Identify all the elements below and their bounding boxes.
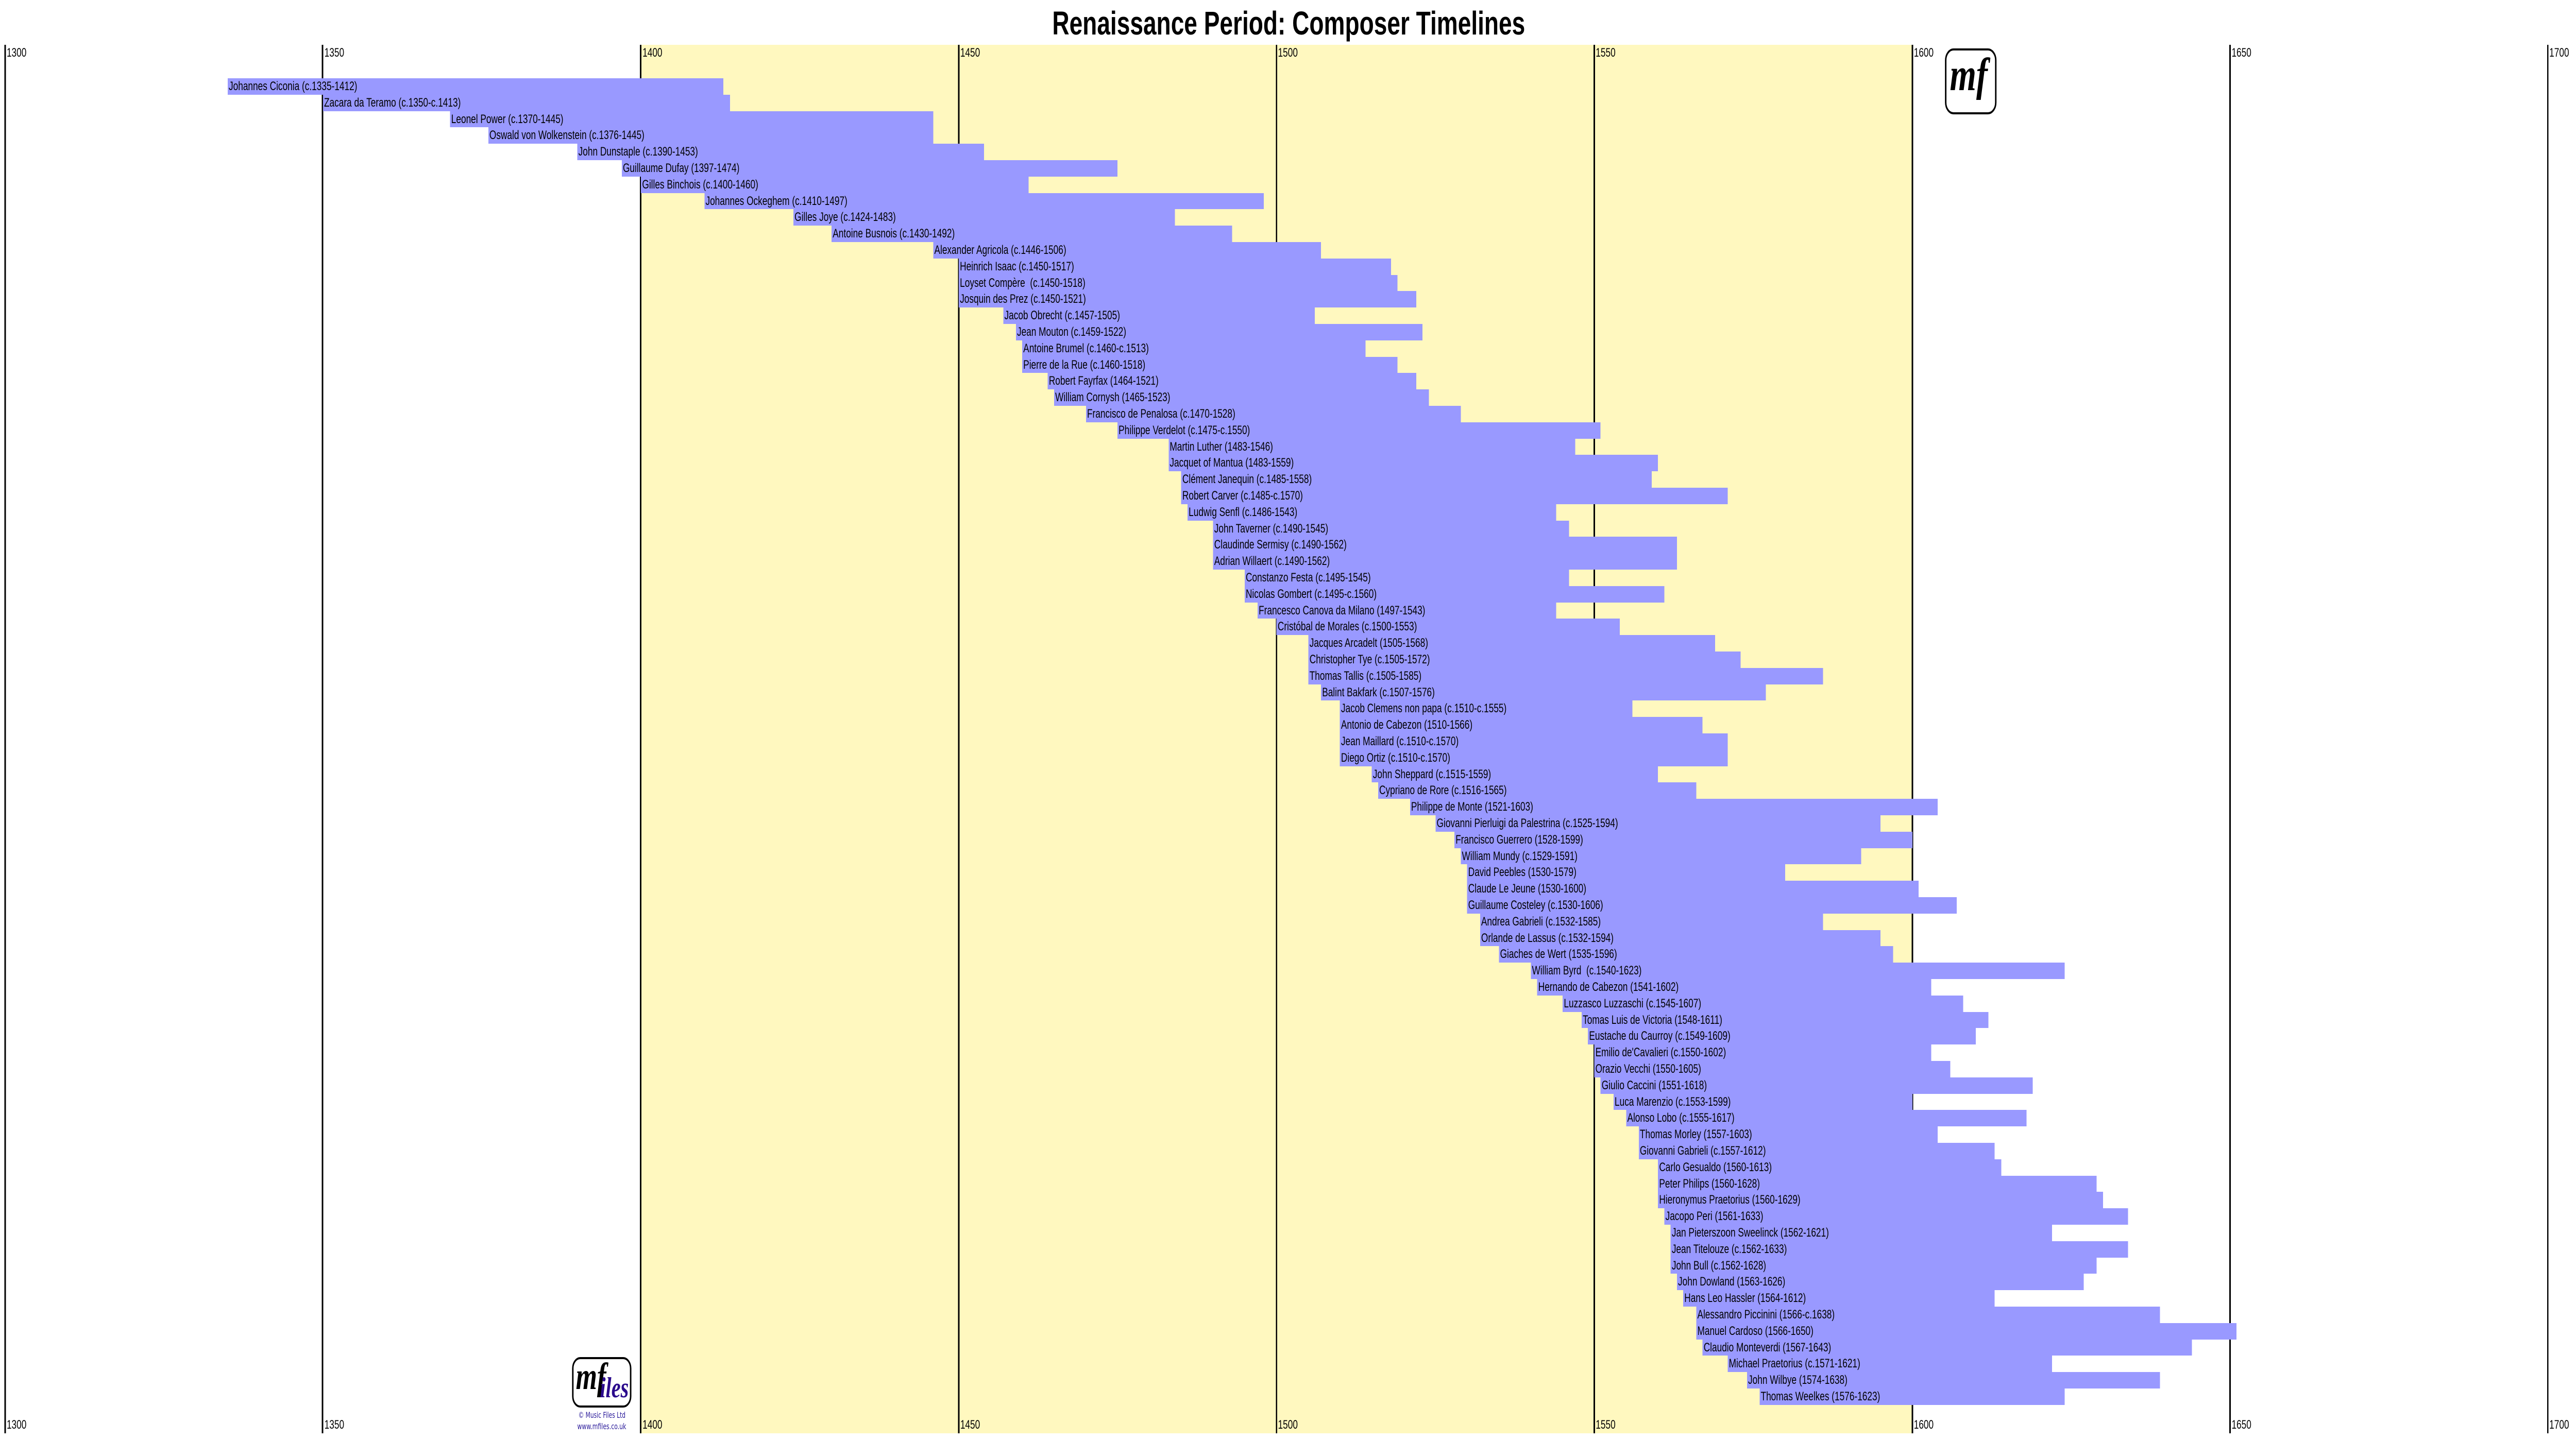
bar: Andrea Gabrieli: Andrea Gabrieli (c.1532-1585) (1481, 915, 1601, 929)
bar: Michael Praetorius: Michael Praetorius (c.1571-1621) (1729, 1357, 1860, 1370)
bar: Nicolas Gombert (1245, 586, 1664, 603)
bar: Martin Luther: Martin Luther (1483-1546) (1170, 440, 1273, 454)
bar: Giaches de Wert (1499, 946, 1893, 963)
year axis: top labels (7, 46, 2569, 60)
bar: Antoine Busnois: Antoine Busnois (c.1430-1492) (833, 227, 955, 241)
logo text: iles: iles (600, 1372, 629, 1404)
logo: mf top right: mf (1950, 49, 1991, 100)
bar: Giaches de Wert: Giaches de Wert (1535-1596) (1500, 947, 1617, 961)
bar: Hernando de Cabezon: Hernando de Cabezon (1541-1602) (1538, 980, 1679, 994)
bar: Leonel Power (450, 111, 933, 127)
bar: Tomas Luis de Victoria: Tomas Luis de Victoria (1548-1611) (1583, 1013, 1722, 1027)
bar: Adrian Willaert: Adrian Willaert (c.1490-1562) (1214, 554, 1330, 568)
bar: Loyset Compere (959, 275, 1397, 291)
bar: Adrian Willaert (1213, 553, 1677, 570)
bar: David Peebles (1467, 864, 1785, 881)
bar: Tomas Luis de Victoria (1582, 1012, 1988, 1028)
website line: www.mfiles.co.uk (577, 1422, 626, 1432)
bar: Luzzasco Luzzaschi: Luzzasco Luzzaschi (c.1545-1607) (1564, 997, 1701, 1010)
bar: Martin Luther (1168, 439, 1575, 455)
bar: John Dunstaple: John Dunstaple (c.1390-1453) (579, 145, 698, 159)
bar: Christopher Tye (1309, 652, 1741, 668)
bar: Jacquet of Mantua (1168, 455, 1658, 471)
bar: Manuel Cardoso (1696, 1323, 2236, 1340)
bar: Robert Fayrfax: Robert Fayrfax (1464-1521) (1049, 374, 1159, 388)
bar: Gilles Joye (793, 209, 1175, 226)
bar: Peter Philips (1658, 1176, 2097, 1192)
bar: Thomas Tallis: Thomas Tallis (c.1505-1585) (1310, 669, 1421, 683)
bar: Giovanni Pierluigi da Palestrina: Giovanni Pierluigi da Palestrina (c.1525-1594) (1437, 816, 1618, 830)
bar: Zacara da Teramo: Zacara da Teramo (c.1350-c.1413) (324, 96, 461, 110)
bar: Orazio Vecchi (1594, 1061, 1950, 1077)
bar: Jan Pieterszoon Sweelinck (1671, 1225, 2052, 1241)
bar: Claudinde Sermisy (1213, 537, 1677, 553)
year label: 1350 top: 1350 (325, 46, 344, 60)
bar: John Sheppard (1372, 766, 1658, 782)
bar: Balint Bakfark (1321, 684, 1766, 700)
bar: Pierre de la Rue: Pierre de la Rue (c.1460-1518) (1023, 358, 1145, 372)
bar: Gilles Joye: Gilles Joye (c.1424-1483) (794, 210, 896, 224)
year label: 1300 bottom: 1300 (7, 1418, 26, 1432)
bar: Thomas Weelkes: Thomas Weelkes (1576-1623) (1761, 1390, 1880, 1403)
bar: Jean Titelouze (1671, 1241, 2128, 1258)
bar: John Dowland (1677, 1274, 2083, 1290)
bar: Oswald von Wolkenstein: Oswald von Wolkenstein (c.1376-1445) (489, 128, 645, 142)
bar: Philippe Verdelot: Philippe Verdelot (c.1475-c.1550) (1118, 423, 1250, 437)
bar: Claude Le Jeune: Claude Le Jeune (1530-1600) (1468, 882, 1586, 896)
year label: 1450 bottom: 1450 (960, 1418, 980, 1432)
bar: Gilles Binchois (641, 177, 1028, 193)
bar: Alexander Agricola (933, 242, 1321, 259)
bar: Christopher Tye: Christopher Tye (c.1505-1572) (1310, 653, 1430, 666)
bar: Francisco Guerrero (1454, 832, 1912, 848)
bar: Johannes Ockeghem: Johannes Ockeghem (c.1410-1497) (705, 194, 848, 208)
bar: William Byrd: William Byrd (c.1540-1623) (1532, 964, 1641, 978)
bar: Jacques Arcadelt: Jacques Arcadelt (1505-1568) (1310, 636, 1428, 650)
bar: Jan Pieterszoon Sweelinck: Jan Pieterszoon Sweelinck (1562-1621) (1672, 1226, 1829, 1240)
bar: Francisco de Penalosa: Francisco de Penalosa (c.1470-1528) (1087, 407, 1235, 421)
bar: Jacques Arcadelt (1309, 635, 1715, 652)
bar: Oswald von Wolkenstein (488, 127, 933, 144)
year label: 1500 bottom: 1500 (1278, 1418, 1298, 1432)
year label: 1350 bottom: 1350 (325, 1418, 344, 1432)
bar: Andrea Gabrieli (1480, 914, 1823, 930)
bar: Loyset Compere: Loyset Compère (c.1450-1518) (960, 276, 1086, 290)
bar: Pierre de la Rue (1022, 357, 1397, 373)
bar: David Peebles: David Peebles (1530-1579) (1468, 865, 1577, 879)
bar: Jacopo Peri: Jacopo Peri (1561-1633) (1666, 1209, 1764, 1223)
bar: Alonso Lobo (1626, 1110, 2027, 1126)
bar: John Taverner (1213, 521, 1569, 537)
title: Renaissance Period: Composer Timelines (1052, 5, 1525, 42)
bar: Jacopo Peri (1664, 1208, 2128, 1225)
bar: Johannes Ciconia (228, 78, 723, 95)
copyright line: © Music Files Ltd (579, 1411, 625, 1420)
bar: Robert Carver: Robert Carver (c.1485-c.1570) (1182, 489, 1303, 503)
bar: Ludwig Senfl: Ludwig Senfl (c.1486-1543) (1189, 505, 1297, 519)
bar: Giulio Caccini: Giulio Caccini (1551-1618) (1602, 1078, 1707, 1092)
year label: 1400 bottom: 1400 (642, 1418, 663, 1432)
year label: 1500 top: 1500 (1278, 46, 1298, 60)
bar: Alexander Agricola: Alexander Agricola (c.1446-1506) (934, 243, 1066, 257)
bar: Manuel Cardoso: Manuel Cardoso (1566-1650) (1697, 1324, 1814, 1338)
year label: 1700 top: 1700 (2549, 46, 2569, 60)
year label: 1700 bottom: 1700 (2549, 1418, 2569, 1432)
chart: composer timeline bars (228, 78, 2236, 1405)
bar: William Mundy: William Mundy (c.1529-1591) (1462, 849, 1578, 863)
bar: Josquin des Prez: Josquin des Prez (c.1450-1521) (960, 292, 1086, 306)
bar: Alessandro Piccinini: Alessandro Piccinini (1566-c.1638) (1697, 1308, 1835, 1322)
bar: John Dowland: John Dowland (1563-1626) (1678, 1275, 1785, 1289)
bar: Antoine Brumel: Antoine Brumel (c.1460-c.1513) (1023, 341, 1149, 355)
bar: Hieronymus Praetorius: Hieronymus Praetorius (1560-1629) (1659, 1193, 1801, 1207)
bar: Claudinde Sermisy: Claudinde Sermisy (c.1490-1562) (1214, 538, 1347, 552)
bar: Carlo Gesualdo: Carlo Gesualdo (1560-1613) (1659, 1160, 1772, 1174)
year axis: bottom labels (7, 1418, 2569, 1432)
bar: John Bull: John Bull (c.1562-1628) (1672, 1259, 1766, 1273)
bar: Diego Ortiz: Diego Ortiz (c.1510-c.1570) (1341, 751, 1450, 765)
bar: Orlande de Lassus: Orlande de Lassus (c.1532-1594) (1481, 931, 1614, 945)
logo: mfiles bottom left with copyright (573, 1356, 631, 1432)
bar: Jean Titelouze: Jean Titelouze (c.1562-1633) (1672, 1242, 1787, 1256)
bar: Guillaume Costeley (1467, 897, 1957, 914)
logo: mf top right (1946, 49, 1996, 113)
bar: Alessandro Piccinini (1696, 1307, 2160, 1323)
year label: 1550 top: 1550 (1596, 46, 1616, 60)
bar: Clement Janequin: Clément Janequin (c.1485-1558) (1182, 472, 1312, 486)
bar: William Cornysh (1054, 389, 1429, 406)
bar: Guillaume Dufay: Guillaume Dufay (1397-1474) (623, 161, 739, 175)
year label: 1550 bottom: 1550 (1596, 1418, 1616, 1432)
bar: Antoine Busnois (832, 226, 1232, 242)
bar: Philippe Verdelot (1117, 422, 1601, 439)
bar: Diego Ortiz (1340, 750, 1727, 766)
panel: Renaissance period band 1400-1600 (641, 45, 1911, 1433)
bar: Constanzo Festa: Constanzo Festa (c.1495-1545) (1246, 571, 1371, 585)
bar: Hans Leo Hassler (1683, 1290, 1995, 1307)
bar: John Bull (1671, 1258, 2097, 1274)
bar: Thomas Morley: Thomas Morley (1557-1603) (1640, 1127, 1752, 1141)
bar: Giulio Caccini (1601, 1077, 2033, 1094)
bar: Jacquet of Mantua: Jacquet of Mantua (1483-1559) (1170, 456, 1294, 470)
year label: 1300 top: 1300 (7, 46, 26, 60)
bar: Antonio de Cabezon (1340, 717, 1703, 733)
bar: Johannes Ciconia: Johannes Ciconia (c.1335-1412) (229, 79, 357, 93)
bar: Orazio Vecchi: Orazio Vecchi (1550-1605) (1596, 1062, 1701, 1076)
bar: Cypriano de Rore: Cypriano de Rore (c.1516-1565) (1379, 783, 1507, 797)
bar: Constanzo Festa (1245, 570, 1569, 586)
bar: Gilles Binchois: Gilles Binchois (c.1400-1460) (642, 178, 758, 192)
bar: Heinrich Isaac: Heinrich Isaac (c.1450-1517) (960, 260, 1074, 273)
bar: Claudio Monteverdi: Claudio Monteverdi (1567-1643) (1704, 1341, 1831, 1355)
bar: Jean Mouton (1016, 324, 1422, 340)
bar: John Sheppard: John Sheppard (c.1515-1559) (1373, 767, 1491, 781)
bar: Johannes Ockeghem (704, 193, 1264, 209)
bar: Luca Marenzio: Luca Marenzio (c.1553-1599) (1615, 1095, 1731, 1109)
bar: Francesco Canova da Milano (1258, 603, 1556, 619)
bar: Ludwig Senfl (1188, 504, 1556, 521)
bar: Eustache du Caurroy: Eustache du Caurroy (c.1549-1609) (1589, 1029, 1731, 1043)
bar: Guillaume Dufay (622, 160, 1117, 177)
bar: Francesco Canova da Milano: Francesco Canova da Milano (1497-1543) (1259, 604, 1425, 618)
bar: Philippe de Monte: Philippe de Monte (1521-1603) (1411, 800, 1533, 814)
bar: Guillaume Costeley: Guillaume Costeley (c.1530-1606) (1468, 898, 1603, 912)
bar: Emilio de'Cavalieri: Emilio de'Cavalieri (c.1550-1602) (1596, 1045, 1726, 1059)
bar: Francisco Guerrero: Francisco Guerrero (1528-1599) (1455, 833, 1583, 847)
bar: Nicolas Gombert: Nicolas Gombert (c.1495-c.1560) (1246, 587, 1377, 601)
bar: John Taverner: John Taverner (c.1490-1545) (1214, 522, 1328, 536)
bar: Cristobal de Morales (1277, 619, 1620, 635)
bar: Francisco de Penalosa (1086, 406, 1461, 422)
logo text: mf: mf (576, 1356, 608, 1397)
bar: Hieronymus Praetorius (1658, 1192, 2103, 1208)
bar: Giovanni Gabrieli: Giovanni Gabrieli (c.1557-1612) (1640, 1144, 1766, 1158)
bar: William Cornysh: William Cornysh (1465-1523) (1055, 390, 1171, 404)
bar: Robert Carver (1181, 488, 1727, 504)
bar: Philippe de Monte (1410, 799, 1938, 815)
bar: Zacara da Teramo (323, 95, 730, 111)
bar: Claudio Monteverdi (1703, 1340, 2192, 1356)
bar: John Dunstaple (577, 144, 984, 160)
bar: Carlo Gesualdo (1658, 1159, 2002, 1176)
bar: Balint Bakfark: Balint Bakfark (c.1507-1576) (1322, 685, 1435, 699)
bar: Claude Le Jeune (1467, 881, 1919, 897)
bar: John Wilbye: John Wilbye (1574-1638) (1748, 1373, 1848, 1387)
bar: Leonel Power: Leonel Power (c.1370-1445) (451, 112, 564, 126)
bar: Giovanni Gabrieli (1639, 1143, 1995, 1159)
bar: Eustache du Caurroy (1588, 1028, 1976, 1044)
bar: Thomas Weelkes (1759, 1388, 2065, 1405)
bar: William Mundy (1461, 848, 1861, 864)
year label: 1600 top: 1600 (1914, 46, 1934, 60)
bar: Jean Mouton: Jean Mouton (c.1459-1522) (1017, 325, 1126, 339)
bar: Peter Philips: Peter Philips (1560-1628) (1659, 1177, 1760, 1191)
bar: Jacob Clemens non papa (1340, 700, 1633, 717)
bar: Hans Leo Hassler: Hans Leo Hassler (1564-1612) (1684, 1291, 1806, 1305)
bar: Thomas Tallis (1309, 668, 1823, 684)
bar: Josquin des Prez (959, 291, 1416, 307)
year label: 1650 bottom: 1650 (2231, 1418, 2251, 1432)
bar: Jacob Clemens non papa: Jacob Clemens non papa (c.1510-c.1555) (1341, 701, 1506, 715)
bar: Luca Marenzio (1614, 1094, 1912, 1110)
year label: 1650 top: 1650 (2231, 46, 2251, 60)
bar: Jean Maillard: Jean Maillard (c.1510-c.1570) (1341, 734, 1459, 748)
bar: Heinrich Isaac (959, 259, 1391, 275)
bar: John Wilbye (1747, 1372, 2160, 1388)
bar: Alonso Lobo: Alonso Lobo (c.1555-1617) (1627, 1111, 1735, 1125)
bar: Robert Fayrfax (1048, 373, 1416, 389)
bar: Antoine Brumel (1022, 340, 1365, 357)
bar: William Byrd (1531, 963, 2065, 979)
bar: Giovanni Pierluigi da Palestrina (1435, 815, 1880, 832)
bar: Cypriano de Rore (1378, 782, 1696, 799)
bar: Orlande de Lassus (1480, 930, 1880, 946)
bar: Michael Praetorius (1727, 1356, 2052, 1372)
year label: 1450 top: 1450 (960, 46, 980, 60)
bar: Antonio de Cabezon: Antonio de Cabezon (1510-1566) (1341, 718, 1472, 732)
bar: Jacob Obrecht (1003, 307, 1315, 324)
bar: Thomas Morley (1639, 1126, 1938, 1143)
year label: 1400 top: 1400 (642, 46, 663, 60)
bar: Jean Maillard (1340, 733, 1727, 750)
year label: 1600 bottom: 1600 (1914, 1418, 1934, 1432)
bar: Cristobal de Morales: Cristóbal de Morales (c.1500-1553) (1278, 620, 1417, 633)
bar: Emilio de'Cavalieri (1594, 1044, 1931, 1061)
bar: Clement Janequin (1181, 471, 1652, 488)
bar: Luzzasco Luzzaschi (1563, 996, 1963, 1012)
bar: Hernando de Cabezon (1537, 979, 1931, 996)
bar: Jacob Obrecht: Jacob Obrecht (c.1457-1505) (1004, 308, 1120, 322)
